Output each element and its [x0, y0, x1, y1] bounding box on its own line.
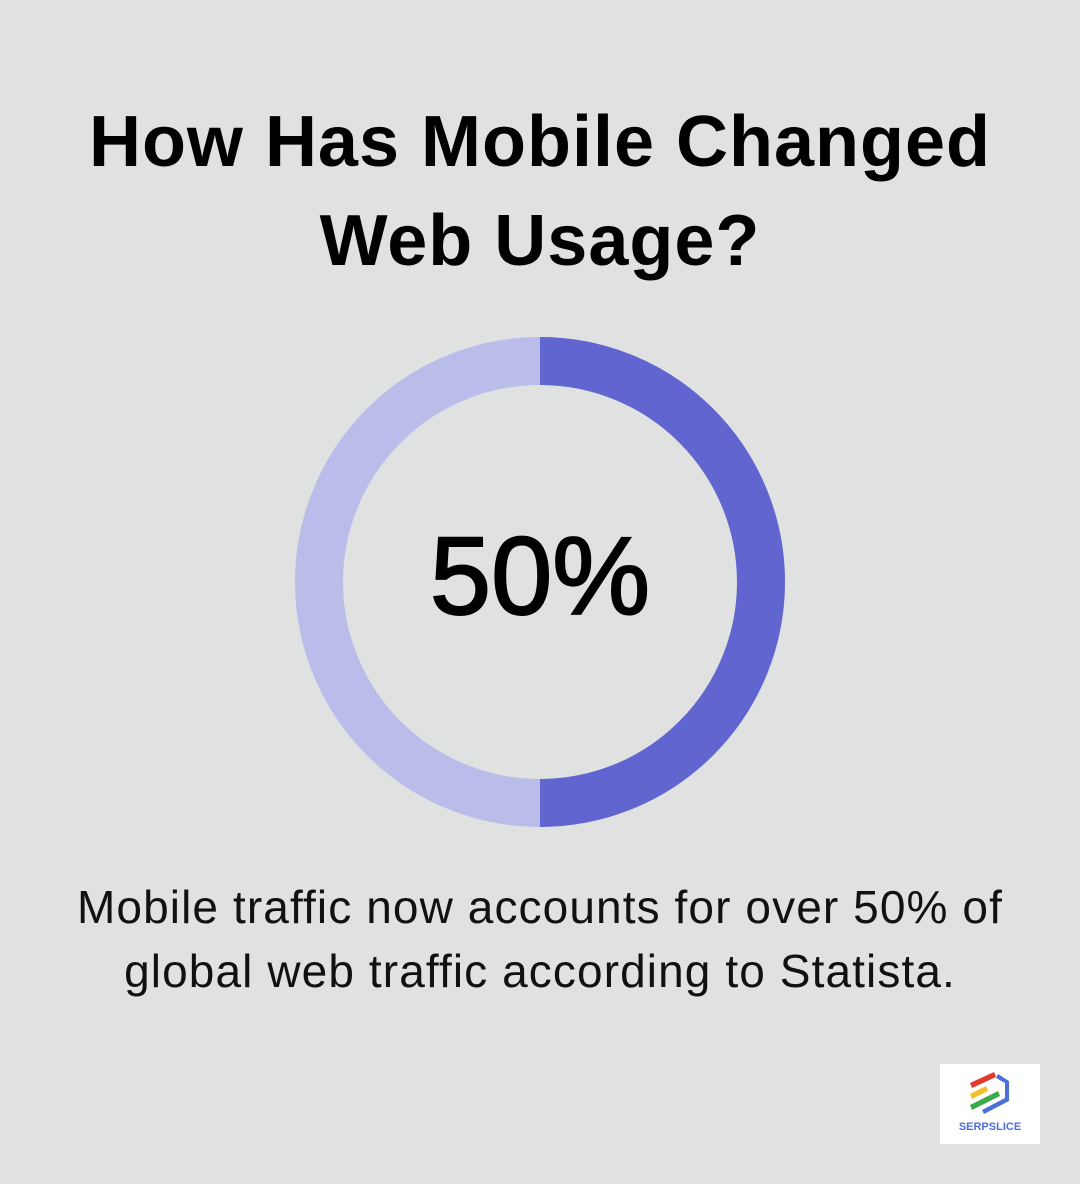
body text: Mobile traffic now accounts for over 50% of: [77, 881, 1003, 933]
logo: SERPSLICE: [959, 1121, 1021, 1133]
logo: [940, 1064, 1040, 1144]
body text: [77, 881, 1003, 997]
donut chart: 50%: [430, 515, 650, 638]
title: [89, 102, 991, 281]
title: How Has Mobile Changed: [89, 102, 991, 182]
title: Web Usage?: [320, 201, 760, 281]
body text: global web traffic according to Statista.: [124, 945, 956, 997]
